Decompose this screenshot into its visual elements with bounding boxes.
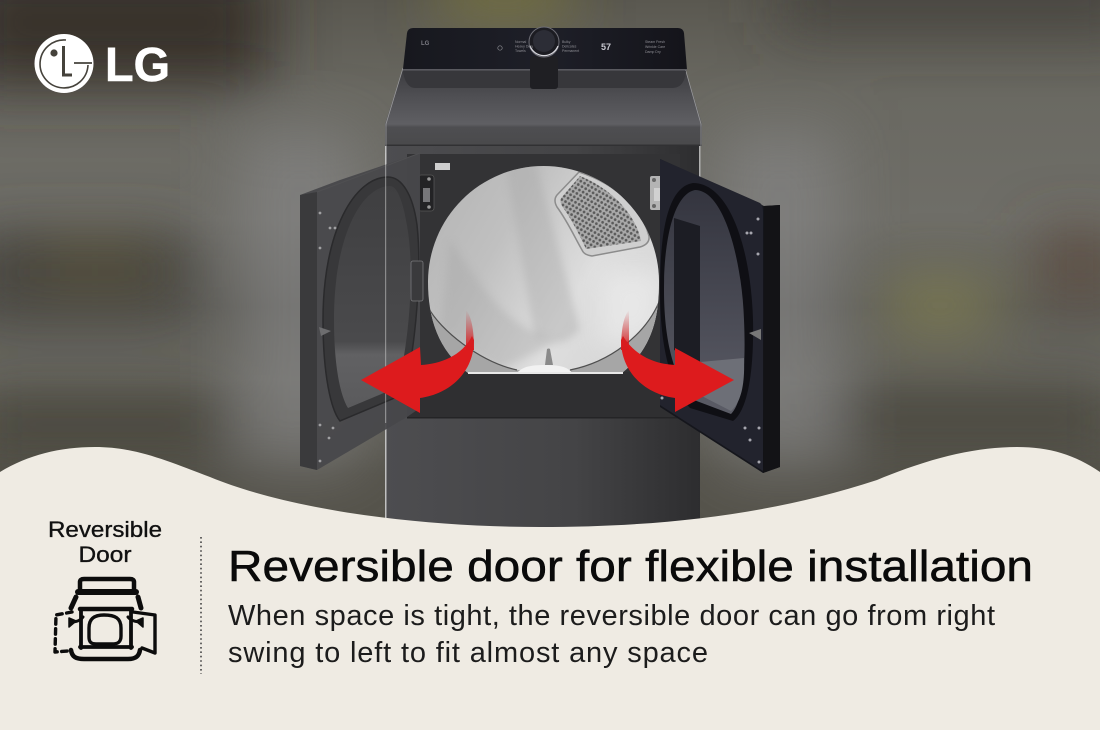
control panel: Normal [515, 40, 527, 44]
left latch [418, 175, 434, 211]
control panel: Permanent [562, 49, 579, 53]
right door window and seal [660, 183, 753, 421]
logo wordmark: LG [105, 39, 170, 92]
heading: Reversible door for flexible installation [228, 542, 1033, 591]
control panel: Damp Dry [645, 50, 661, 54]
LG logo [34, 34, 170, 93]
description [228, 600, 995, 669]
drum interior [428, 166, 659, 373]
door opening frame [407, 154, 680, 418]
control panel: Delicates [562, 44, 577, 48]
feature label [48, 517, 162, 567]
control panel: Steam Fresh [645, 40, 665, 44]
description: swing to left to fit almost any space [228, 637, 708, 669]
control panel: Towels [515, 49, 526, 53]
control panel: Bulky [562, 40, 571, 44]
logo circle mark [34, 34, 94, 93]
icon arrows [70, 617, 83, 622]
control panel [403, 27, 687, 89]
lint filter grille [555, 172, 649, 256]
dryer lid [385, 68, 702, 146]
dryer cabinet [385, 146, 700, 531]
control panel: Heavy Duty [515, 44, 533, 48]
left door window and seal [323, 177, 419, 421]
right hinge [650, 176, 666, 210]
left door, open [300, 153, 423, 470]
label sticker [435, 163, 450, 170]
dryer [385, 27, 702, 531]
arrow: right door swing [621, 310, 734, 412]
dotted divider [200, 537, 202, 674]
icon: dryer with reversible door [55, 579, 155, 659]
control panel: 57 [601, 42, 611, 52]
feature label: Door [78, 542, 132, 567]
cream wave panel [0, 447, 1100, 730]
arrow: left door swing [361, 310, 474, 413]
feature label: Reversible [48, 517, 162, 542]
icon lid [80, 579, 134, 592]
control panel: LG [421, 41, 430, 47]
right door, open [660, 159, 780, 473]
description: When space is tight, the reversible door can go from right [228, 600, 995, 632]
control panel: Wrinkle Care [645, 45, 665, 49]
door strike [411, 261, 423, 301]
